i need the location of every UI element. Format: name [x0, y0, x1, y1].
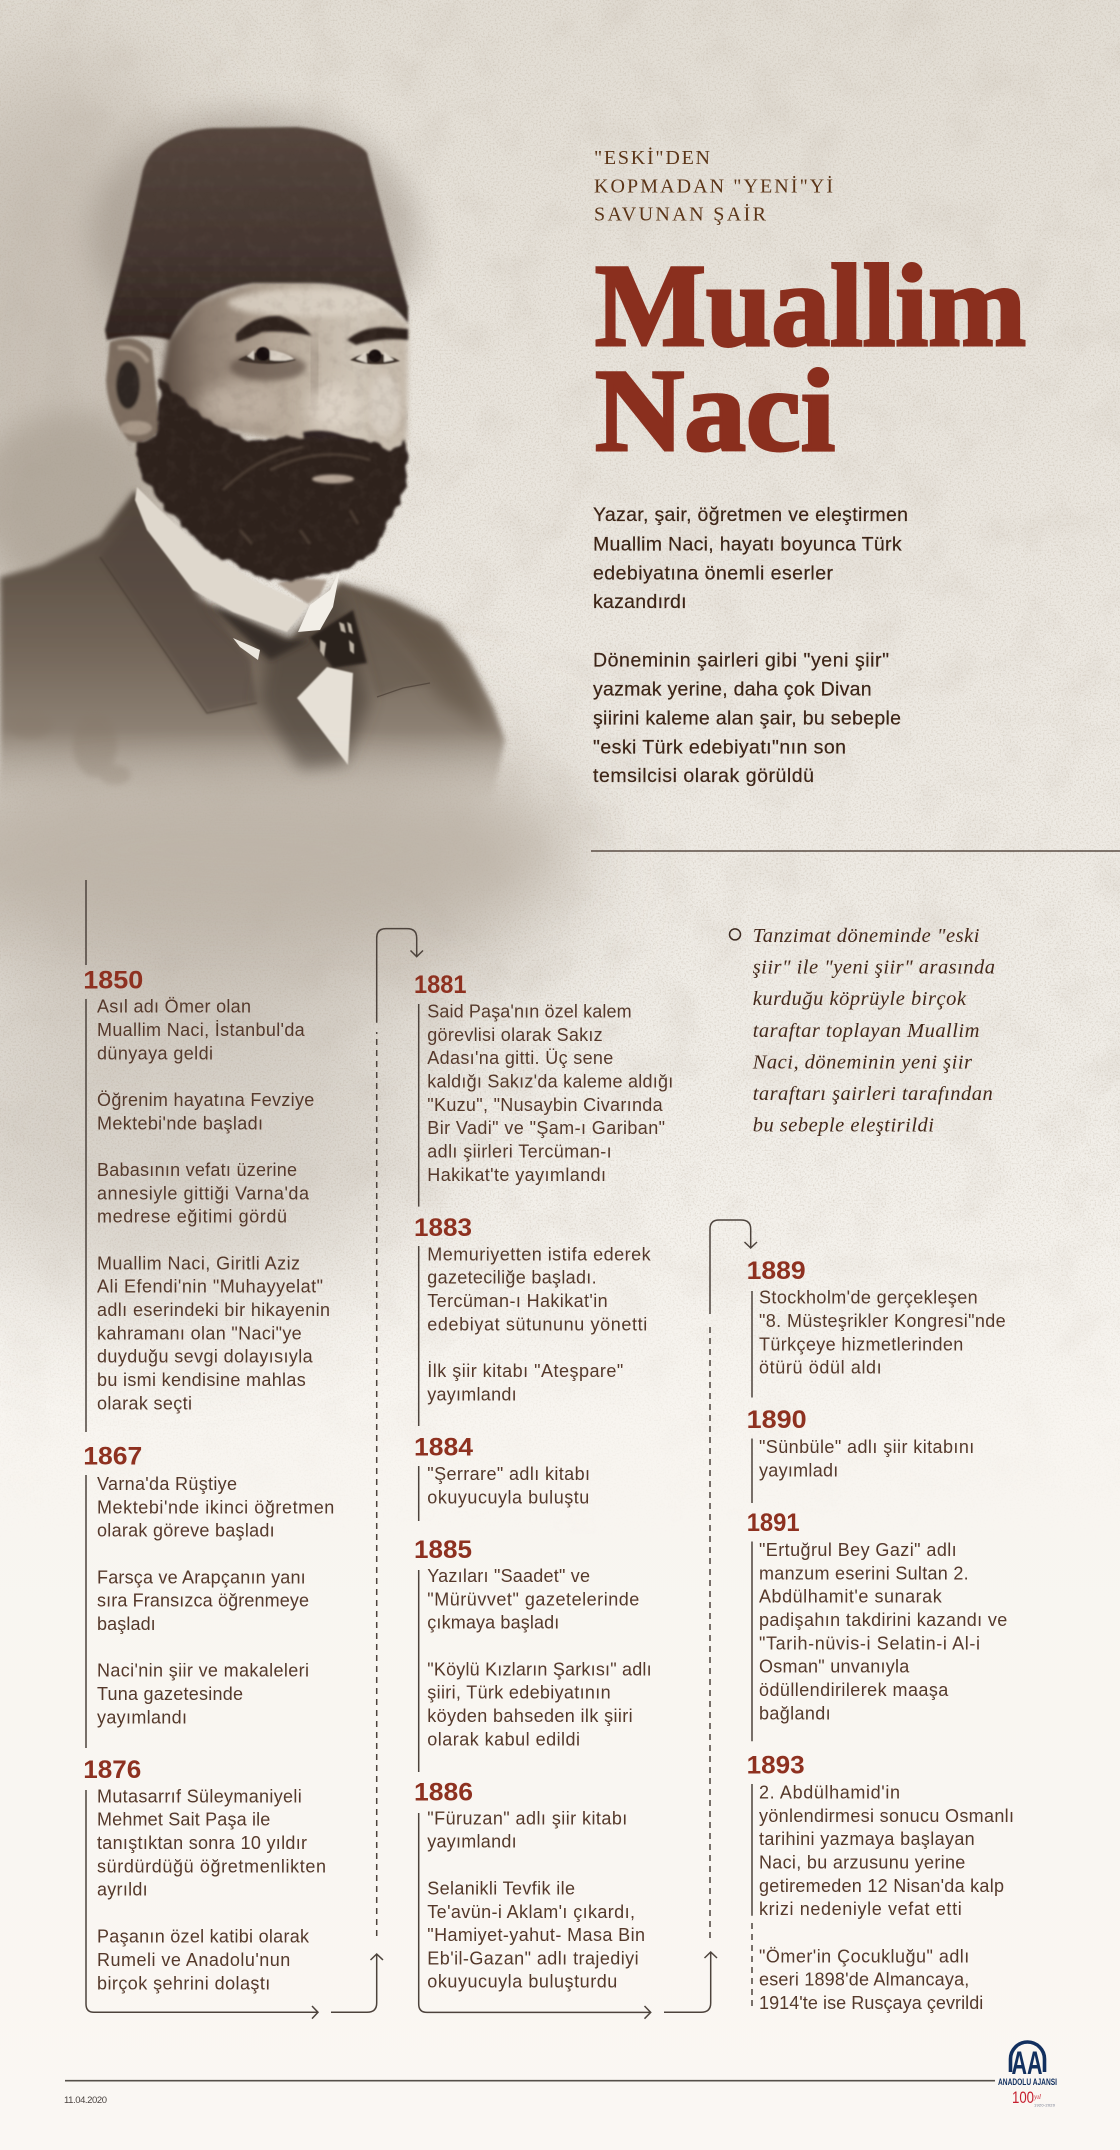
- callout: italic note: şiir" ile "yeni şiir" arasında: [753, 957, 995, 979]
- portrait photograph of Muallim Naci: [0, 110, 570, 910]
- entry: 1850: bu ismi kendisine mahlas: [97, 1370, 306, 1390]
- intro text: [593, 504, 908, 787]
- entry: 1850: Muallim Naci, Giritli Aziz: [97, 1253, 300, 1273]
- entry: 1885: 1885: [414, 1536, 472, 1564]
- entry: 1893: 1914'te ise Rusçaya çevrildi: [759, 1993, 983, 2013]
- icon: circle bullet: [730, 929, 740, 940]
- intro text: "eski Türk edebiyatı"nın son: [593, 736, 846, 758]
- entry: 1885: köyden bahseden ilk şiiri: [427, 1706, 633, 1726]
- entry: 1886: Selanikli Tevfik ile: [427, 1878, 575, 1898]
- entry: 1885: çıkmaya başladı: [427, 1613, 559, 1633]
- entry: 1889: 1889: [747, 1257, 806, 1285]
- logo: Anadolu Ajansi: yıl: [1033, 2093, 1041, 2101]
- callout: italic note: taraftarı şairleri tarafından: [753, 1083, 993, 1105]
- entry: 1889: [747, 1257, 1006, 1398]
- entry: 1881: Bir Vadi" ve "Şam-ı Gariban": [427, 1118, 665, 1138]
- neck: [277, 578, 327, 604]
- entry: 1889: Türkçeye hizmetlerinden: [759, 1334, 963, 1354]
- entry: 1890: 1890: [747, 1406, 807, 1434]
- callout: italic note: bu sebeple eleştirildi: [753, 1115, 934, 1137]
- callout: italic note: kurduğu köprüyle birçok: [753, 988, 967, 1010]
- entry: 1893: 2. Abdülhamid'in: [759, 1782, 900, 1802]
- timeline column 1: [83, 880, 334, 2019]
- intro text: edebiyatına önemli eserler: [593, 562, 834, 584]
- subtitle: "ESKİ"DEN: [594, 146, 710, 169]
- entry: 1890: "Sünbüle" adlı şiir kitabını: [759, 1437, 974, 1457]
- shoulder shade right: [345, 585, 490, 730]
- entry: 1891: Abdülhamit'e sunarak: [759, 1587, 943, 1607]
- entry: 1876: Mehmet Sait Paşa ile: [97, 1810, 270, 1830]
- entry: 1893: tarihini yazmaya başlayan: [759, 1829, 975, 1849]
- timeline column 2: [414, 971, 673, 2019]
- arrow: column 2 bottom run: [419, 1813, 651, 2019]
- entry: 1889: ötürü ödül aldı: [759, 1358, 882, 1378]
- entry: 1891: 1891: [747, 1509, 800, 1537]
- entry: 1876: ayrıldı: [97, 1880, 148, 1900]
- entry: 1881: Said Paşa'nın özel kalem: [427, 1002, 632, 1022]
- entry: 1883: İlk şiir kitabı "Ateşpare": [427, 1361, 623, 1381]
- entry: 1885: [414, 1536, 652, 1772]
- entry: 1893: getiremeden 12 Nisan'da kalp: [759, 1876, 1004, 1896]
- entry: 1886: yayımlandı: [427, 1832, 517, 1852]
- entry: 1867: Farsça ve Arapçanın yanı: [97, 1567, 306, 1587]
- beard and moustache: [137, 378, 407, 582]
- logo: Anadolu Ajansi: 1920-2020: [1034, 2102, 1056, 2108]
- entry: 1881: [414, 971, 673, 1207]
- entry: 1891: Osman" unvanıyla: [759, 1657, 910, 1677]
- entry: 1883: gazeteciliğe başladı.: [427, 1268, 597, 1288]
- eyes: [238, 347, 400, 364]
- entry: 1893: Naci, bu arzusunu yerine: [759, 1852, 965, 1872]
- entry: 1886: [414, 1779, 645, 1992]
- entry: 1850: dünyaya geldi: [97, 1043, 213, 1063]
- entry: 1883: Memuriyetten istifa ederek: [427, 1244, 652, 1264]
- title: Muallim: [595, 240, 1026, 371]
- eyebrows: [236, 316, 408, 345]
- paper background: [0, 0, 1120, 1494]
- logo: Anadolu Ajansi: AA: [1012, 2045, 1042, 2081]
- entry: 1881: kaldığı Sakız'da kaleme aldığı: [427, 1072, 673, 1092]
- entry: 1867: Tuna gazetesinde: [97, 1684, 243, 1704]
- intro text: Döneminin şairleri gibi "yeni şiir": [593, 649, 889, 671]
- lips: [312, 474, 354, 484]
- entry: 1883: [414, 1214, 652, 1426]
- entry: 1891: bağlandı: [759, 1703, 831, 1723]
- entry: 1893: krizi nedeniyle vefat etti: [759, 1899, 962, 1919]
- entry: 1889: "8. Müsteşrikler Kongresi"nde: [759, 1311, 1006, 1331]
- heading block: [594, 146, 1026, 476]
- entry: 1893: "Ömer'in Çocukluğu" adlı: [759, 1946, 969, 1966]
- subtitle: SAVUNAN ŞAİR: [594, 202, 767, 226]
- lapel left: [100, 513, 257, 713]
- nose and cheek light: [308, 384, 360, 432]
- logo: Anadolu Ajansi: 100: [1012, 2088, 1034, 2107]
- entry: 1867: Mektebi'nde ikinci öğretmen: [97, 1497, 334, 1517]
- entry: 1867: 1867: [83, 1443, 142, 1471]
- tie: [310, 610, 367, 668]
- entry: 1885: olarak kabul edildi: [427, 1729, 580, 1749]
- entry: 1881: görevlisi olarak Sakız: [427, 1025, 603, 1045]
- entry: 1867: Naci'nin şiir ve makaleleri: [97, 1661, 309, 1681]
- entry: 1867: olarak göreve başladı: [97, 1521, 275, 1541]
- entry: 1886: "Füruzan" adlı şiir kitabı: [427, 1808, 627, 1828]
- entry: 1867: sıra Fransızca öğrenmeye: [97, 1591, 309, 1611]
- entry: 1886: "Hamiyet-yahut- Masa Bin: [427, 1925, 645, 1945]
- ear: [106, 338, 160, 442]
- entry: 1850: adlı eserindeki bir hikayenin: [97, 1300, 330, 1320]
- entry: 1850: 1850: [83, 966, 143, 994]
- entry: 1883: edebiyat sütununu yönetti: [427, 1314, 647, 1334]
- callout: italic note: Naci, döneminin yeni şiir: [752, 1051, 973, 1073]
- entry: 1850: medrese eğitimi gördü: [97, 1207, 287, 1227]
- entry: 1850: olarak seçti: [97, 1393, 192, 1413]
- entry: 1850: Öğrenim hayatına Fevziye: [97, 1090, 314, 1110]
- entry: 1850: Babasının vefatı üzerine: [97, 1160, 297, 1180]
- entry: 1883: yayımlandı: [427, 1384, 517, 1404]
- jacket stains: [8, 711, 131, 785]
- entry: 1867: Varna'da Rüştiye: [97, 1474, 237, 1494]
- entry: 1893: 1893: [747, 1752, 805, 1780]
- eye shadow: [230, 353, 306, 381]
- portrait halo: [90, 110, 420, 360]
- timeline line top: [85, 880, 87, 965]
- connector arrow: column 1 to column 2: [331, 929, 423, 2012]
- callout: italic note: taraftar toplayan Muallim: [753, 1020, 979, 1042]
- entry: 1889: Stockholm'de gerçekleşen: [759, 1288, 978, 1308]
- intro text: şiirini kaleme alan şair, bu sebeple: [593, 707, 901, 729]
- entry: 1891: padişahın takdirini kazandı ve: [759, 1610, 1007, 1630]
- lower fade: [0, 790, 570, 910]
- face: [160, 283, 408, 455]
- entry: 1886: okuyucuyla buluşturdu: [427, 1972, 617, 1992]
- entry: 1890: yayımladı: [759, 1460, 838, 1480]
- waistcoat: [207, 590, 370, 770]
- entry: 1893: yönlendirmesi sonucu Osmanlı: [759, 1806, 1014, 1826]
- entry: 1876: Mutasarrıf Süleymaniyeli: [97, 1786, 302, 1806]
- entry: 1891: ödüllendirilerek maaşa: [759, 1680, 949, 1700]
- icon: AA arc: [1010, 2042, 1044, 2072]
- entry: 1890: [747, 1406, 974, 1503]
- entry: 1850: Mektebi'nde başladı: [97, 1113, 263, 1133]
- entry: 1850: [83, 966, 330, 1432]
- connector arrow: column 2 to column 3: [664, 1220, 757, 2012]
- entry: 1886: 1886: [414, 1779, 473, 1807]
- nose shadow: [303, 431, 372, 448]
- entry: 1885: "Mürüvvet" gazetelerinde: [427, 1589, 639, 1609]
- portrait texture: [119, 286, 408, 577]
- divider rule: [591, 850, 1120, 852]
- entry: 1867: yayımlandı: [97, 1707, 187, 1727]
- entry: 1876: [83, 1756, 326, 1993]
- entry: 1885: şiiri, Türk edebiyatının: [427, 1683, 611, 1703]
- footer rule: [65, 2080, 995, 2082]
- entry: 1876: sürdürdüğü öğretmenlikten: [97, 1856, 326, 1876]
- entry: 1867: başladı: [97, 1614, 156, 1634]
- entry: 1884: okuyucuyla buluştu: [427, 1487, 589, 1507]
- subtitle: KOPMADAN "YENİ"Yİ: [594, 175, 833, 198]
- entry: 1876: Paşanın özel katibi olarak: [97, 1927, 310, 1947]
- entry: 1881: "Kuzu", "Nusaybin Civarında: [427, 1095, 664, 1115]
- entry: 1850: Ali Efendi'nin "Muhayyelat": [97, 1277, 323, 1297]
- entry: 1884: [414, 1434, 590, 1521]
- entry: 1893: eseri 1898'de Almancaya,: [759, 1970, 969, 1990]
- logo: Anadolu Ajansi: [998, 2042, 1057, 2108]
- intro text: kazandırdı: [593, 591, 687, 613]
- intro text: yazmak yerine, daha çok Divan: [593, 678, 872, 700]
- entry: 1850: kahramanı olan "Naci"ye: [97, 1323, 302, 1343]
- timeline column 3: [747, 1257, 1014, 2013]
- forehead light: [228, 289, 392, 317]
- entry: 1850: annesiyle gittiği Varna'da: [97, 1183, 310, 1203]
- entry: 1891: "Ertuğrul Bey Gazi" adlı: [759, 1540, 957, 1560]
- entry: 1891: [747, 1509, 1007, 1741]
- entry: 1850: duyduğu sevgi dolayısıyla: [97, 1347, 314, 1367]
- callout: italic note: [730, 925, 995, 1137]
- date: 11.04.2020: [64, 2095, 107, 2106]
- entry: 1881: adlı şiirleri Tercüman-ı: [427, 1142, 612, 1162]
- entry: 1881: Hakikat'te yayımlandı: [427, 1165, 606, 1185]
- lapel right: [340, 584, 430, 697]
- title: Naci: [595, 345, 835, 476]
- entry: 1891: "Tarih-nüvis-i Selatin-i Al-i: [759, 1633, 980, 1653]
- arrow: column 1 bottom run: [86, 1790, 318, 2019]
- callout: italic note: Tanzimat döneminde "eski: [753, 925, 980, 947]
- fez: [105, 127, 408, 340]
- jacket: [0, 490, 505, 810]
- entry: 1850: Muallim Naci, İstanbul'da: [97, 1020, 306, 1040]
- entry: 1886: Eb'il-Gazan" adlı trajediyi: [427, 1948, 639, 1968]
- entry: 1891: manzum eserini Sultan 2.: [759, 1563, 969, 1583]
- entry: 1867: [83, 1443, 334, 1748]
- entry: 1885: "Köylü Kızların Şarkısı" adlı: [427, 1659, 652, 1679]
- shirt front piece: [297, 667, 353, 765]
- entry: 1876: tanıştıktan sonra 10 yıldır: [97, 1833, 307, 1853]
- entry: 1876: Rumeli ve Anadolu'nun: [97, 1950, 290, 1970]
- title: [595, 240, 1026, 476]
- entry: 1881: 1881: [414, 971, 467, 999]
- entry: 1884: "Şerrare" adlı kitabı: [427, 1464, 590, 1484]
- intro text: temsilcisi olarak görüldü: [593, 765, 814, 787]
- entry: 1876: 1876: [83, 1756, 141, 1784]
- entry: 1876: birçok şehrini dolaştı: [97, 1973, 270, 1993]
- entry: 1883: Tercüman-ı Hakikat'in: [427, 1291, 608, 1311]
- subtitle: [594, 146, 833, 226]
- intro text: Muallim Naci, hayatı boyunca Türk: [593, 533, 902, 555]
- collar: [135, 487, 308, 632]
- entry: 1850: Asıl adı Ömer olan: [97, 997, 251, 1017]
- entry: 1883: 1883: [414, 1214, 472, 1242]
- entry: 1885: Yazıları "Saadet" ve: [427, 1566, 590, 1586]
- entry: 1886: Te'avün-i Aklam'ı çıkardı,: [427, 1902, 635, 1922]
- entry: 1884: 1884: [414, 1434, 473, 1462]
- logo: Anadolu Ajansi: ANADOLU AJANSI: [998, 2077, 1057, 2088]
- intro text: Yazar, şair, öğretmen ve eleştirmen: [593, 504, 908, 526]
- entry: 1893: [747, 1752, 1014, 2013]
- entry: 1881: Adası'na gitti. Üç sene: [427, 1048, 613, 1068]
